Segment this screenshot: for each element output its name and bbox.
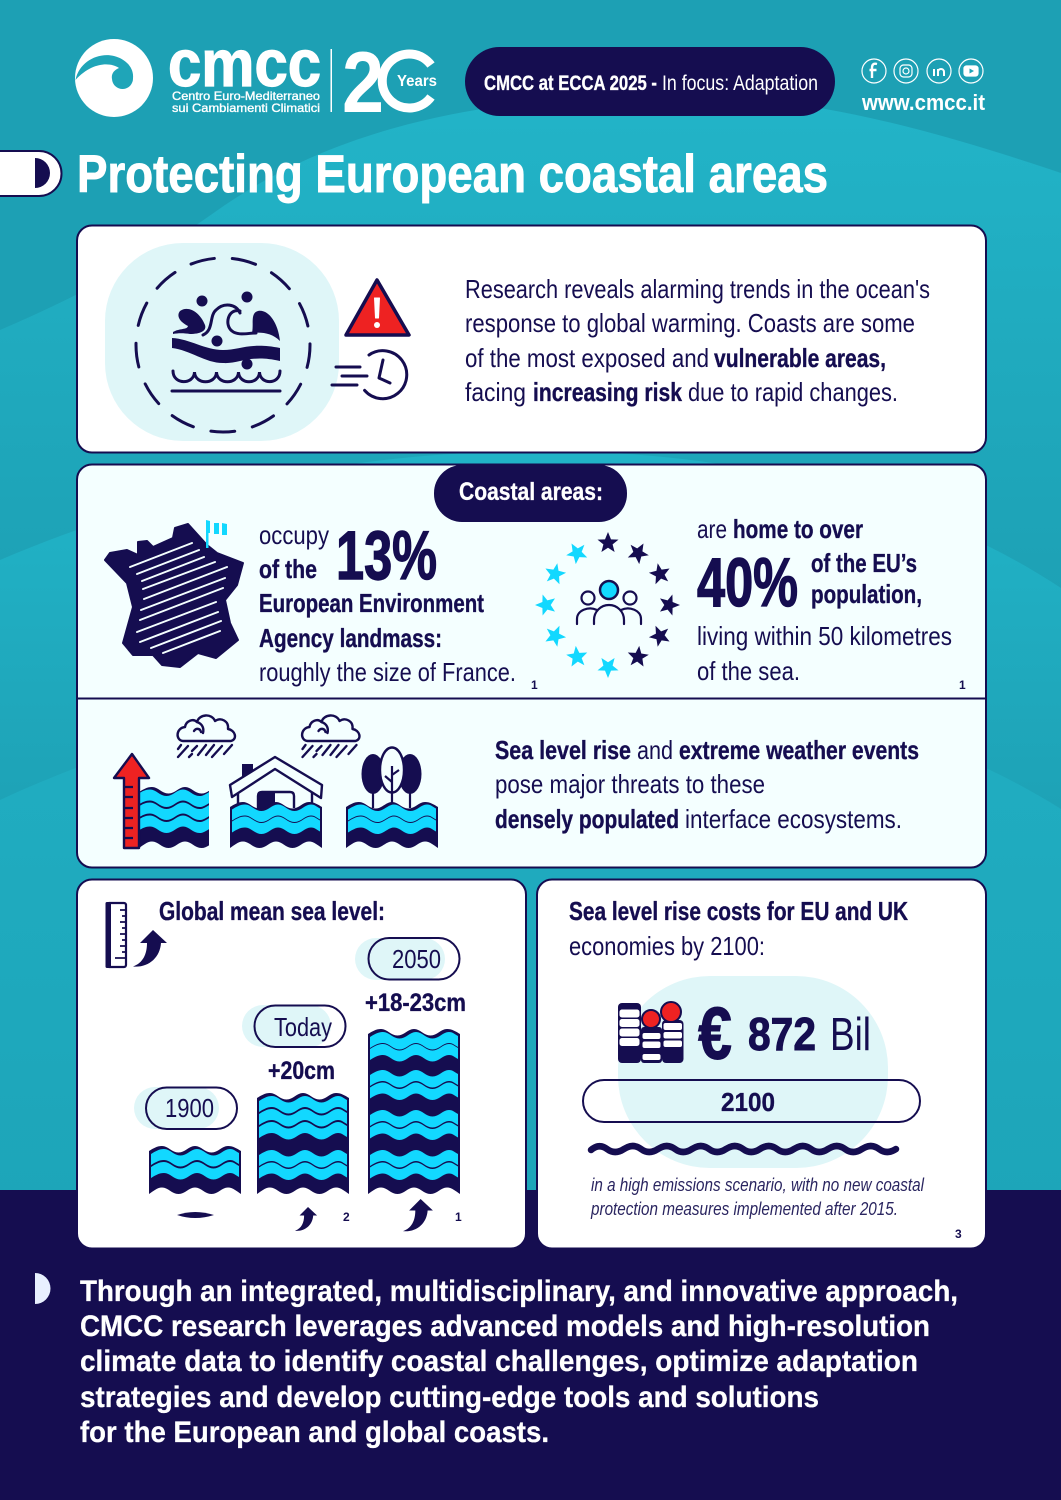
label pill: 2050 (355, 938, 460, 980)
year pill (583, 1080, 920, 1122)
event focus: In focus: Adaptation (662, 72, 818, 95)
icon: second cloud with rain (302, 715, 359, 757)
threats text: densely populated (495, 804, 679, 834)
population text (697, 514, 966, 692)
value: +20cm: +20cm (268, 1057, 335, 1085)
landmass text: roughly the size of France. (259, 657, 516, 687)
label pill: 2050: 2050 (392, 944, 441, 974)
landmass text: of the (259, 554, 317, 584)
population text: living within 50 kilometres (697, 621, 952, 651)
intro text: vulnerable areas, (714, 343, 886, 373)
panel: costs (537, 880, 986, 1248)
stat: 13%: 13% (336, 517, 437, 594)
icons: sea level threats (114, 715, 438, 848)
heading pill (434, 465, 627, 522)
logo subtitle line 1: Centro Euro-Mediterraneo (172, 89, 320, 103)
intro text: Research reveals alarming trends in the ocean's (465, 274, 930, 304)
intro text: facing (465, 377, 526, 407)
arrow: today rise (295, 1207, 317, 1231)
intro text: response to global warming. Coasts are some (465, 308, 915, 338)
value: +18-23cm: +18-23cm (365, 989, 466, 1017)
label pill: Today: Today (274, 1012, 332, 1042)
event pill (465, 47, 835, 116)
population text: home to over (733, 514, 863, 544)
intro text: of the most exposed and (465, 343, 709, 373)
logo: CMCC 20 years (75, 26, 437, 131)
reference 2: 2 (343, 1210, 350, 1224)
icon: EU stars and people (535, 532, 680, 678)
icon: fast clock (332, 351, 407, 399)
arrow: 2050 rise (403, 1199, 433, 1231)
costs heading (569, 896, 908, 961)
label pill: Today (242, 1005, 346, 1047)
conclusion text (80, 1275, 958, 1449)
threats text: and (637, 735, 673, 765)
landmass text: Agency landmass: (259, 623, 442, 653)
icon: cloud with rain (178, 715, 235, 757)
threats text: extreme weather events (679, 735, 919, 765)
water column: 2050 (368, 1029, 460, 1194)
population text: 1 (959, 678, 966, 692)
conclusion marker (35, 1273, 50, 1304)
scenario note (590, 1174, 925, 1219)
icon: coin stacks (618, 1002, 684, 1063)
population text: are (697, 514, 727, 544)
intro text: increasing risk (533, 377, 682, 407)
intro text (465, 274, 930, 407)
population text: of the sea. (697, 656, 800, 686)
website: www.cmcc.it (861, 90, 986, 115)
panel heading: Global mean sea level: (159, 896, 385, 926)
year pill: 2100 (721, 1087, 775, 1117)
threats text (495, 735, 919, 834)
water column: 1900 (149, 1146, 241, 1194)
icon: flooded trees (346, 748, 438, 848)
panel: coastal areas (77, 464, 986, 868)
landmass text (259, 517, 538, 692)
panel: global mean sea level (77, 880, 526, 1248)
stat: 40%: 40% (697, 544, 798, 621)
icon: flooded house (230, 757, 322, 848)
wave line (591, 1146, 896, 1152)
wordmark: cmcc (168, 26, 321, 100)
social icons (862, 59, 983, 83)
conclusion text: for the European and global coasts. (80, 1416, 549, 1449)
title: Protecting European coastal areas (77, 145, 828, 204)
value: Bil: Bil (830, 1008, 871, 1060)
costs heading: Sea level rise costs for EU and UK (569, 896, 908, 926)
conclusion text: strategies and develop cutting-edge tools and solutions (80, 1381, 819, 1414)
marker: flat level (177, 1212, 214, 1218)
anniversary ring (382, 54, 431, 108)
water column: Today (257, 1093, 349, 1194)
heading pill: Coastal areas: (459, 478, 603, 506)
event name: CMCC at ECCA 2025 - (484, 72, 657, 95)
logo subtitle line 2: sui Cambiamenti Climatici (172, 101, 320, 115)
conclusion text: climate data to identify coastal challenges, optimize adaptation (80, 1345, 918, 1378)
anniversary numeral 2: 2 (342, 35, 384, 131)
scenario note: in a high emissions scenario, with no new coastal (591, 1174, 925, 1195)
value: 872: 872 (748, 1008, 816, 1060)
intro text: due to rapid changes. (688, 377, 898, 407)
reference 1: 1 (455, 1210, 462, 1224)
landmass text: 1 (531, 678, 538, 692)
icon: ruler with arrow (106, 902, 167, 968)
threats text: interface ecosystems. (685, 804, 902, 834)
landmass text: European Environment (259, 588, 484, 618)
divider (330, 49, 332, 112)
conclusion text: CMCC research leverages advanced models and high-resolution (80, 1310, 930, 1343)
title marker (0, 151, 62, 196)
icon: France map (105, 520, 243, 667)
landmass text: occupy (259, 520, 329, 550)
icon: warning triangle (346, 280, 409, 335)
threats text: Sea level rise (495, 735, 631, 765)
label pill: 1900 (134, 1087, 237, 1129)
population text: of the EU’s (811, 548, 917, 578)
value: euro symbol: € (698, 992, 732, 1075)
label pill: 1900: 1900 (165, 1093, 214, 1123)
panel: intro (77, 226, 986, 452)
reference 3: 3 (955, 1227, 962, 1241)
decorative blob (618, 976, 888, 1168)
conclusion text: Through an integrated, multidisciplinary, and innovative approach, (80, 1275, 958, 1308)
threats text: pose major threats to these (495, 769, 765, 799)
icon: vulnerable coast (105, 243, 339, 441)
icon: swirl (75, 39, 153, 117)
population text: population, (811, 579, 922, 609)
scenario note: protection measures implemented after 2015. (590, 1198, 898, 1219)
costs heading: economies by 2100: (569, 931, 765, 961)
icon: rising water with arrow (112, 752, 209, 850)
years label: Years (397, 73, 437, 90)
